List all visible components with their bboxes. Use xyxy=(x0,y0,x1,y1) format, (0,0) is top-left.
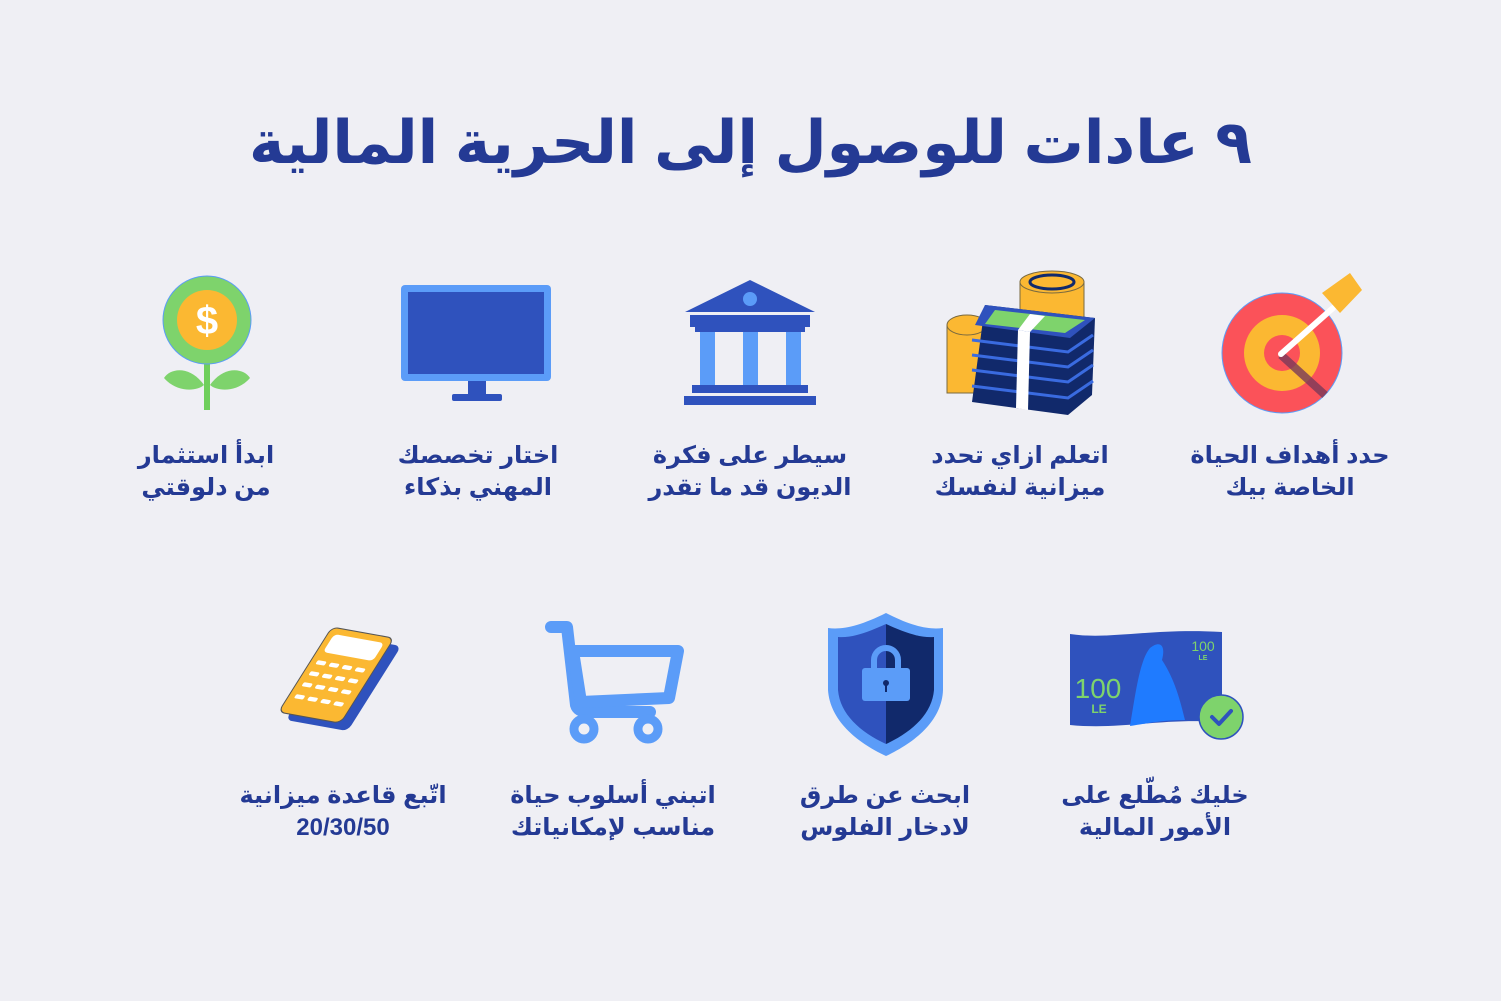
label: goals xyxy=(1190,439,1390,501)
label: lifestyle: اتبني أسلوب حياة xyxy=(510,782,716,809)
label: start investing: من دلوقتي xyxy=(141,474,271,501)
icon: target xyxy=(1222,273,1362,413)
label: choose career xyxy=(398,442,558,501)
icon: money plant: $ xyxy=(196,299,218,343)
label: budget: اتعلم ازاي تحدد xyxy=(931,442,1109,469)
label: control debt: سيطر على فكرة xyxy=(653,442,847,469)
label: control debt: الديون قد ما تقدر xyxy=(648,474,852,501)
icon: calculator xyxy=(275,627,405,731)
label: stay informed: الأمور المالية xyxy=(1079,814,1231,841)
label: choose career: المهني بذكاء xyxy=(404,474,552,501)
label: stay informed: خليك مُطّلع على xyxy=(1061,782,1249,809)
label: saving: لادخار الفلوس xyxy=(800,814,970,841)
label: stay informed xyxy=(1061,776,1249,841)
label: saving: ابحث عن طرق xyxy=(800,782,970,809)
icon: shield with lock xyxy=(828,613,943,756)
icon: 100 LE banknote with check: LE xyxy=(1199,655,1208,662)
title: ٩ عادات للوصول إلى الحرية المالية xyxy=(249,109,1252,176)
label: 50/30/20 rule: 20/30/50 xyxy=(296,814,390,841)
label: 50/30/20 rule xyxy=(239,782,447,841)
icon: money stack with coins xyxy=(947,271,1095,415)
icon: 100 LE banknote with check: LE xyxy=(1091,702,1107,716)
label: lifestyle xyxy=(510,779,716,841)
label: goals: الخاصة بيك xyxy=(1225,474,1355,501)
label: goals: حدد أهداف الحياة xyxy=(1190,442,1390,469)
icon: bank xyxy=(684,280,816,405)
label: control debt xyxy=(648,442,852,501)
icon: shopping cart xyxy=(551,627,678,739)
label: choose career: اختار تخصصك xyxy=(398,442,558,469)
label: start investing xyxy=(136,439,274,501)
icon: monitor xyxy=(401,285,551,401)
label: budget xyxy=(931,442,1109,501)
label: saving xyxy=(800,782,970,841)
label: 50/30/20 rule: اتّبع قاعدة ميزانية xyxy=(239,782,447,809)
label: budget: ميزانية لنفسك xyxy=(935,474,1105,501)
icon: 100 LE banknote with check xyxy=(1070,631,1243,739)
icon: money plant xyxy=(163,276,251,410)
label: lifestyle: مناسب لإمكانياتك xyxy=(511,814,715,841)
label: start investing: ابدأ استثمار xyxy=(138,442,274,469)
icon: 100 LE banknote with check: 100 xyxy=(1075,673,1121,704)
icon: 100 LE banknote with check: 100 xyxy=(1191,638,1215,654)
